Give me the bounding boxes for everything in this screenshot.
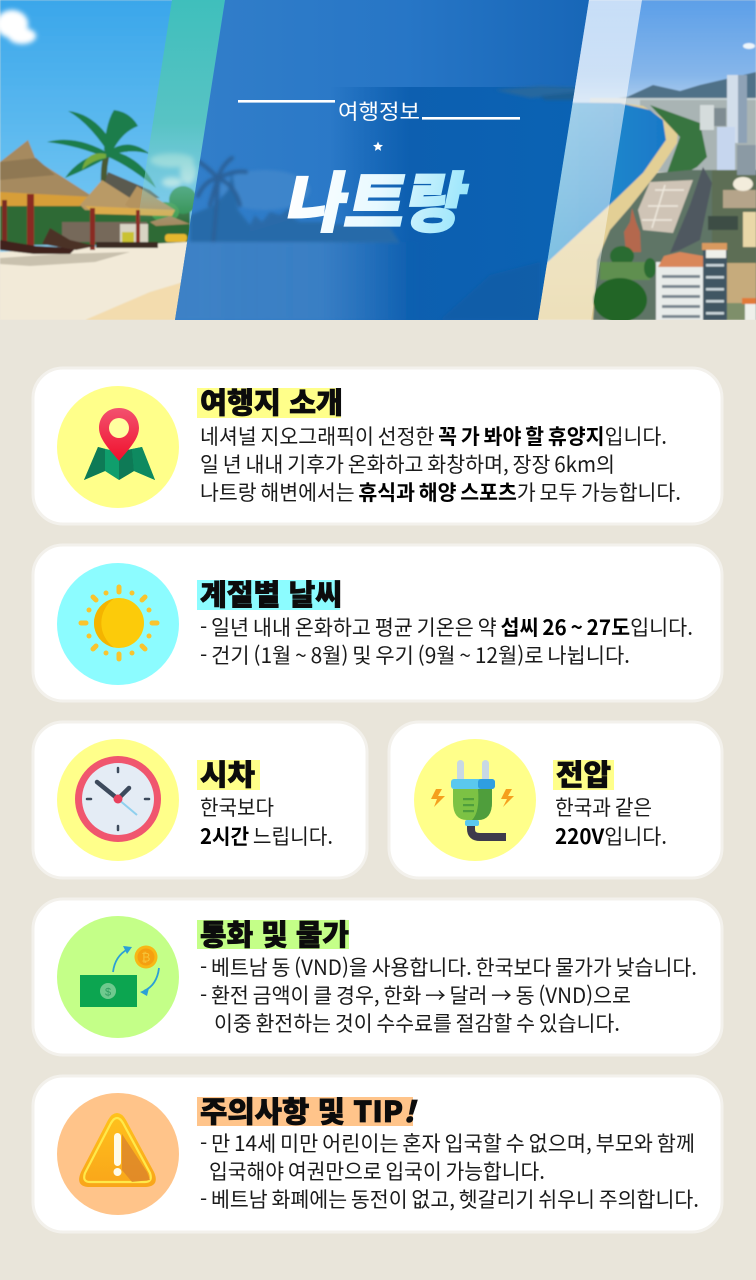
icon: clock [57,739,179,861]
heading: 시차: 시차 [200,752,255,794]
heading: 계절별 날씨: 계절별 날씨 [200,572,342,614]
text: currency [200,952,697,1038]
icon: star [373,142,383,151]
domed building [723,190,756,208]
title: 나트랑: 나트랑 [280,167,474,240]
text: voltage: 220V입니다. [555,821,667,851]
hero banner [0,0,756,322]
tinted shoreline trees and castle [190,170,400,243]
text: weather [200,612,693,670]
icon: money exchange: $ [105,986,111,998]
mountains [622,72,756,99]
text: time difference: 한국보다 [200,792,274,822]
icon: money exchange [57,916,179,1038]
text: currency: 이중 환전하는 것이 수수료를 절감할 수 있습니다. [214,1008,620,1038]
beach [530,103,678,320]
text: cautions and tips [200,1128,699,1214]
text: introduction: 네셔널 지오그래픽이 선정한 꼭 가 봐야 할 휴양지입니다. [200,421,667,451]
text: cautions and tips: - 만 14세 미만 어린이는 혼자 입국할 수 없으며, 부모와 함께 [200,1128,695,1158]
text: cautions and tips: - 베트남 화폐에는 동전이 없고, 헷갈리기 쉬우니 주의합니다. [200,1184,699,1214]
green promenade [650,105,707,180]
banner label: 여행정보: 여행정보 [338,101,420,124]
towers [726,74,739,144]
text: currency: - 베트남 동 (VND)을 사용합니다. 한국보다 물가가 낮습니다. [200,952,697,982]
palm tree [47,110,156,188]
panel: 여행지 소개 [33,368,722,524]
photo: Nha Trang coast and city [530,0,756,322]
city skyline [640,100,756,172]
panel: 전압 [389,722,722,878]
blue tinted panel [170,0,595,320]
sand [0,240,188,320]
heading: 주의사항 및 TIP!: 주의사항 및 TIP! [200,1089,417,1131]
icon: money exchange: ₿ [142,950,151,964]
text: voltage [555,792,667,851]
trees [610,246,634,262]
text: weather: - 건기 (1월 ~ 8월) 및 우기 (9월 ~ 12월)로 나뉩니다. [200,640,630,670]
icon: plug [414,739,536,861]
text: currency: - 환전 금액이 클 경우, 한화 → 달러 → 동 (VND)으로 [200,980,631,1010]
photo: tropical beach huts [0,0,240,320]
heading: 전압: 전압 [556,752,611,794]
sea [547,102,666,264]
text: time difference: 2시간 느립니다. [200,821,333,851]
road [670,167,712,253]
heading: 통화 및 물가: 통화 및 물가 [200,912,349,954]
loungers [0,240,76,254]
panel: 시차 [33,722,367,878]
vegetation behind huts [0,205,190,245]
panel: 계절별 날씨 [33,545,722,701]
text: cautions and tips: 입국해야 여권만으로 입국이 가능합니다. [209,1156,545,1186]
straw huts [100,172,160,198]
plaza [638,180,693,233]
panel: 통화 및 물가 [33,899,722,1055]
translucent light band [538,0,642,320]
text: introduction [200,421,681,507]
text: time difference [200,792,333,851]
icon: sun [57,563,179,685]
hotel [656,262,706,320]
text: weather: - 일년 내내 온화하고 평균 기온은 약 섭씨 26 ~ 27도입니다. [200,612,693,642]
text: introduction: 일 년 내내 기후가 온화하고 화창하며, 장장 6km의 [200,449,615,479]
text: voltage: 한국과 같은 [555,792,652,822]
text: introduction: 나트랑 해변에서는 휴식과 해양 스포츠가 모두 가능합니다. [200,477,681,507]
icon: map pin [57,386,179,508]
teal translucent band [137,0,225,225]
heading: 여행지 소개: 여행지 소개 [200,380,343,422]
panel: 주의사항 및 TIP! [33,1076,722,1232]
spire building [624,208,641,252]
icon: warning triangle [57,1093,179,1215]
